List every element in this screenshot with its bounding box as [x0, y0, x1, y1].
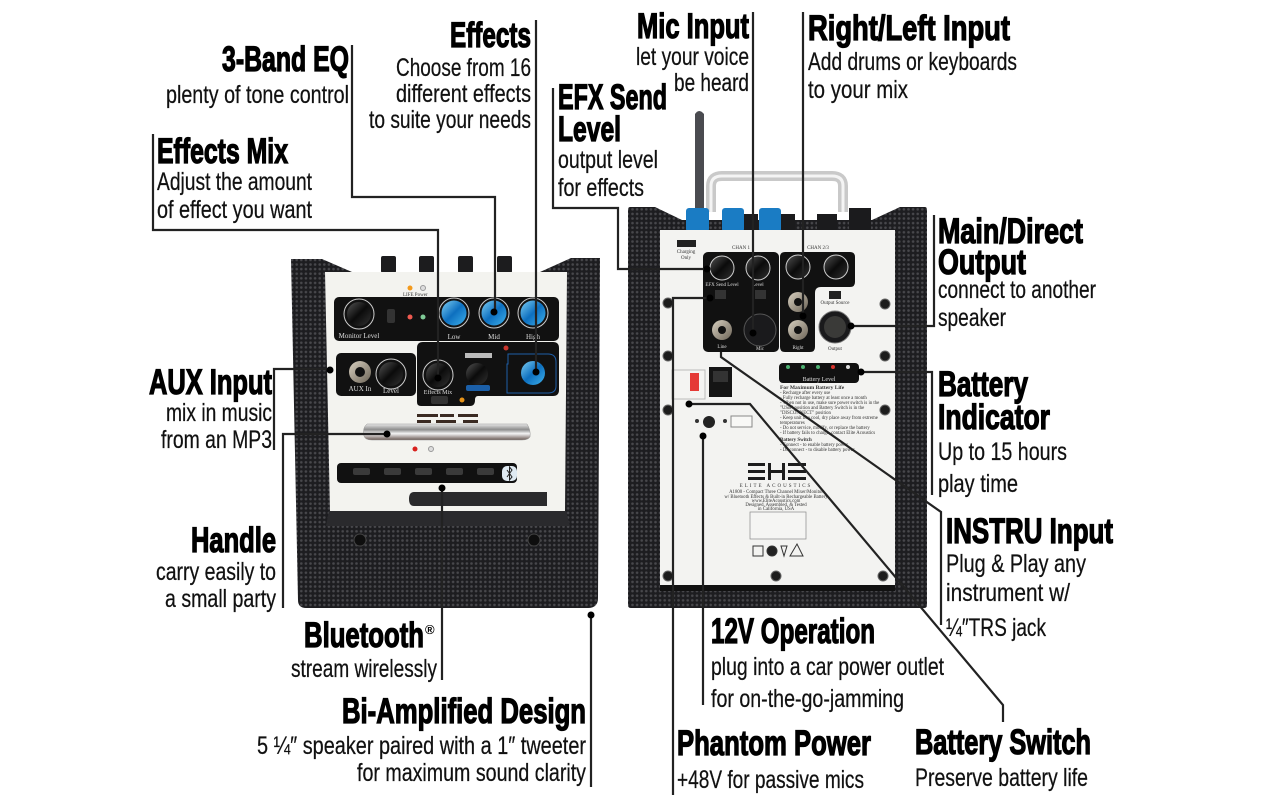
channel 1 panel: EFX Send Level [705, 283, 739, 288]
label: Effects: to suite your needs [369, 106, 531, 134]
leader: 3-Band EQ [352, 45, 498, 316]
label: 3-Band EQ [166, 40, 349, 109]
label: Handle [156, 521, 276, 613]
label: Right/Left Input: to your mix [808, 76, 908, 104]
rear logo [740, 463, 812, 489]
EQ knobs: High [526, 333, 540, 341]
channel 2/3 panel: Right [792, 346, 804, 351]
battery instructions: "USB" position and Battery Switch is in the [780, 406, 864, 411]
channel 2/3 panel [780, 246, 855, 352]
screws [354, 534, 540, 546]
main output connector [819, 291, 851, 352]
label: Phantom Power: +48V for passive mics [677, 766, 864, 794]
leader lines [153, 12, 1003, 795]
USB charging port: Only [681, 256, 692, 261]
product text: A1800 - Compact Three Channel Mixer/Monitor [729, 490, 823, 495]
EQ knobs: Mid [488, 333, 500, 341]
label: Right/Left Input: Add drums or keyboards [808, 48, 1017, 76]
label: 12V Operation: 12V Operation [711, 612, 875, 651]
label: Battery Indicator: Indicator [938, 398, 1050, 437]
label: Bluetooth: ® [425, 622, 435, 637]
main output connector: Output Source [820, 301, 850, 306]
label: INSTRU Input: INSTRU Input [946, 512, 1113, 551]
label: AUX Input: mix in music [166, 399, 272, 427]
EQ knobs: Low [448, 333, 461, 341]
battery instructions: - Connect - to enable battery power [780, 443, 848, 448]
battery instructions: - When not in use, make sure power switch is in the [780, 401, 879, 406]
leader: INSTRU Input [721, 352, 941, 625]
label: INSTRU Input: ¼″TRS jack [946, 614, 1046, 642]
label: EFX Send Level: EFX Send [558, 78, 667, 117]
label: 12V Operation [711, 612, 944, 713]
label: Main/Direct Output [938, 212, 1096, 332]
label: Mic Input: let your voice [636, 43, 749, 71]
battery instructions: For Maximum Battery Life [780, 385, 845, 391]
screws [663, 298, 890, 581]
label: Handle: a small party [165, 585, 276, 613]
effects panel: Effects Mix [424, 389, 452, 396]
label: Effects Mix: of effect you want [157, 196, 312, 224]
main output connector: Output [828, 347, 843, 352]
monitor level knob: Monitor Level [339, 332, 379, 340]
leader: Battery Switch [686, 400, 1003, 722]
label: Phantom Power: Phantom Power [677, 724, 871, 763]
label: Battery Indicator: Up to 15 hours [938, 438, 1067, 466]
carry handle [711, 176, 843, 212]
EQ knobs [439, 298, 548, 341]
label: INSTRU Input [946, 512, 1113, 642]
battery level panel [779, 363, 859, 383]
leader: Bluetooth [438, 484, 446, 680]
label: Right/Left Input [808, 9, 1017, 104]
leader: AUX Input [274, 366, 334, 450]
rear knobs [686, 208, 871, 232]
label: Battery Switch: Battery Switch [915, 723, 1091, 762]
label: Battery Indicator [938, 365, 1067, 498]
leader: Right/Left Input [800, 12, 806, 320]
effects panel [417, 342, 559, 406]
channel 2/3 panel: CHAN 2/3 [807, 246, 829, 251]
antenna [695, 111, 704, 212]
label: EFX Send Level: output level [558, 146, 658, 174]
label: 3-Band EQ: 3-Band EQ [222, 40, 349, 79]
battery instructions: - Disconnect - to disable battery power [780, 448, 855, 453]
label: Effects [369, 16, 531, 134]
label: EFX Send Level [558, 78, 667, 202]
battery instructions: - Keep unit in a cool, dry place away from extreme [780, 416, 878, 421]
label: Mic Input [636, 7, 749, 97]
label: Battery Switch: Preserve battery life [915, 764, 1088, 792]
battery level panel: Battery Level [803, 377, 836, 383]
leader: Bi-Amplified Design [588, 612, 594, 787]
battery instructions: - Fully recharge battery at least once a month [780, 396, 867, 401]
certification icons [753, 544, 803, 556]
label: INSTRU Input: Plug & Play any [946, 550, 1086, 578]
leader: Effects [532, 20, 540, 376]
label: 12V Operation: plug into a car power outlet [711, 653, 944, 681]
label: INSTRU Input: instrument w/ [946, 579, 1070, 607]
label: EFX Send Level: Level [558, 110, 621, 149]
channel 1 panel: Line [717, 345, 727, 350]
product text [724, 490, 828, 512]
serial number box [750, 512, 806, 539]
cabinet [291, 258, 600, 608]
handle [363, 424, 530, 440]
DC input [695, 416, 752, 428]
label: Effects: different effects [396, 80, 531, 108]
logo [417, 414, 478, 423]
label: 12V Operation: for on-the-go-jamming [711, 685, 904, 713]
label: Effects Mix: Adjust the amount [157, 168, 312, 196]
status LEDs: LIFE Power [403, 293, 428, 298]
label: EFX Send Level: for effects [558, 174, 644, 202]
channel 1 panel: Mic [756, 347, 765, 352]
label: Effects Mix: Effects Mix [157, 132, 288, 171]
status LEDs [403, 286, 428, 298]
label: Handle: Handle [191, 521, 276, 560]
top knobs [381, 256, 512, 273]
leader: Main/Direct Output [848, 215, 934, 330]
label: Effects Mix [157, 132, 312, 224]
antenna [409, 492, 547, 506]
AUX panel: Level [383, 387, 399, 395]
channel 1 panel [703, 246, 779, 352]
leader: Effects Mix [153, 134, 442, 382]
USB charging port: Charging [677, 250, 696, 255]
label: Handle: carry easily to [156, 558, 276, 586]
leader: 12V Operation [700, 432, 706, 705]
USB charging port [677, 240, 696, 261]
faceplate [325, 272, 567, 512]
product text: w/ Bluetooth Effects & Built-in Rechargeable Battery [724, 495, 828, 500]
product text: in California, USA [758, 507, 795, 512]
battery instructions [780, 385, 879, 453]
inner frame shadow [326, 511, 570, 526]
monitor level knob [339, 299, 379, 340]
label: Phantom Power [677, 724, 871, 794]
product text: www.EliteAcoustics.com [752, 499, 801, 504]
battery instructions: "DISCONNECT" position [780, 411, 832, 416]
leader: Battery Indicator [858, 368, 932, 495]
label: Bluetooth: Bluetooth [304, 616, 424, 655]
label: Bi-Amplified Design: 5 ¼″ speaker paired with a 1″ tweeter [257, 732, 586, 760]
battery instructions: Battery Switch [780, 438, 812, 443]
label: Effects: Choose from 16 [396, 54, 531, 82]
AUX panel [336, 353, 416, 396]
label: Battery Switch [915, 723, 1091, 792]
battery instructions: - Recharge after every use [780, 391, 830, 396]
label: Right/Left Input: Right/Left Input [808, 9, 1010, 48]
back plate [660, 230, 895, 585]
label: AUX Input [149, 363, 272, 454]
label: Bi-Amplified Design: for maximum sound clarity [357, 759, 586, 787]
label: Effects: Effects [450, 16, 531, 55]
label: Main/Direct Output: Main/Direct [938, 212, 1083, 251]
label: Battery Indicator: play time [938, 470, 1018, 498]
leader: Phantom Power [673, 294, 714, 795]
battery switch [672, 370, 705, 399]
label: 3-Band EQ: plenty of tone control [166, 81, 349, 109]
battery instructions: - Do not service, modify, or replace the battery [780, 426, 870, 431]
channel 1 panel: CHAN 1 [732, 246, 750, 251]
label: AUX Input: from an MP3 [161, 426, 272, 454]
label: Battery Indicator: Battery [938, 365, 1028, 404]
label: Main/Direct Output: Output [938, 243, 1026, 282]
battery instructions: temperatures [780, 421, 805, 426]
leader: EFX Send [553, 88, 710, 272]
bluetooth buttons [337, 463, 517, 483]
label: Main/Direct Output: speaker [938, 304, 1006, 332]
speaker: rear view [628, 111, 927, 608]
battery instructions: - If battery fails to charge, contact Elite Acoustics [780, 431, 875, 436]
cabinet [628, 207, 927, 608]
label: Main/Direct Output: connect to another [938, 276, 1096, 304]
label: Bluetooth [291, 616, 437, 683]
control strip [334, 297, 559, 341]
speaker: front view [291, 256, 600, 608]
channel 1 panel: Level [752, 283, 764, 288]
AUX panel: AUX In [349, 385, 372, 393]
label: Bluetooth: stream wirelessly [291, 655, 437, 683]
leader: Handle [283, 430, 390, 608]
power switch [709, 367, 732, 397]
label: Bi-Amplified Design [257, 692, 586, 787]
label: Mic Input: be heard [674, 69, 749, 97]
label: Mic Input: Mic Input [637, 7, 749, 46]
label: Bi-Amplified Design: Bi-Amplified Design [342, 692, 586, 731]
product text: Designed, Assembled, & Tested [745, 503, 807, 508]
label: AUX Input: AUX Input [149, 363, 272, 402]
rear logo: ELITE ACOUSTICS [740, 484, 812, 489]
leader: Mic Input [750, 12, 756, 336]
